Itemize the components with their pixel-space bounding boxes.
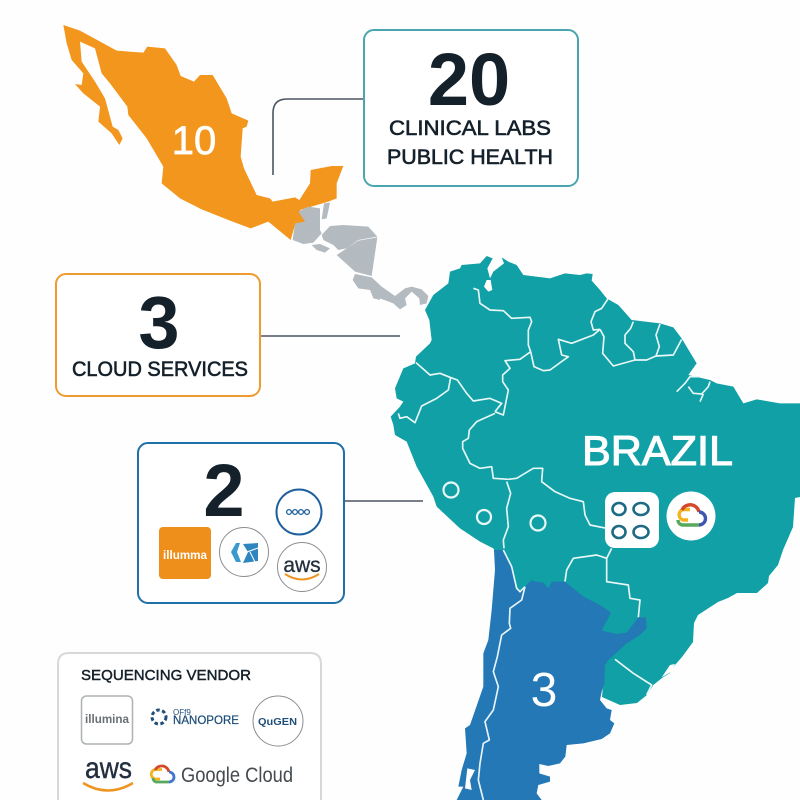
stat: 3: 3 xyxy=(138,281,180,364)
logo: Google Cloud: Google Cloud xyxy=(181,764,293,787)
logo: illumina tile: illumma xyxy=(163,548,207,562)
logo: illumina tile xyxy=(159,527,211,579)
logo: Oxford Nanopore: NANOPORE xyxy=(173,715,239,727)
logo: navy ring circle xyxy=(276,490,322,534)
arrow: clinical labs leader xyxy=(273,99,363,175)
panel: clinical labs xyxy=(364,30,578,186)
logo: Qiagen: QuGEN xyxy=(258,717,297,728)
label: Brazil: BRAZIL xyxy=(582,427,733,474)
logo: Oxford Nanopore xyxy=(152,708,239,727)
logo: Oxford Nanopore: OFf9 xyxy=(173,708,191,717)
logo: blue mosaic circle xyxy=(220,528,268,576)
stat: 2: 2 xyxy=(203,449,245,532)
map: Argentina and Chile xyxy=(457,550,647,800)
logo: illumina xyxy=(82,696,132,744)
panel: sequencing vendor legend xyxy=(58,653,321,800)
arrow: vendors leader xyxy=(344,500,423,502)
logo: aws: aws xyxy=(85,752,132,785)
stat: 20: 20 xyxy=(428,38,510,121)
panel: vendors in Peru and Bolivia xyxy=(138,443,344,603)
label: Argentina count: 3 xyxy=(531,664,557,717)
logo: aws circle xyxy=(278,542,326,592)
markers: Peru and Bolivia sites xyxy=(444,482,546,530)
text: public health: PUBLIC HEALTH xyxy=(387,146,553,169)
arrow: cloud services leader xyxy=(261,335,400,337)
logo: Qiagen xyxy=(253,696,303,746)
label: Mexico count: 10 xyxy=(172,119,216,163)
text: clinical labs: CLINICAL LABS xyxy=(389,117,551,140)
logo: illumina: illumina xyxy=(85,712,129,726)
logo: aws circle: aws xyxy=(283,554,321,577)
map: Mexico xyxy=(63,25,343,240)
icon: Google Cloud badge xyxy=(666,492,716,540)
map: northern South America and Brazil xyxy=(391,256,800,705)
panel: cloud services xyxy=(56,274,260,396)
heading: sequencing vendor: SEQUENCING VENDOR xyxy=(81,667,251,684)
map: Central America xyxy=(293,203,428,309)
text: cloud services: CLOUD SERVICES xyxy=(72,358,248,381)
icon: four-ring vendor tile xyxy=(605,492,659,548)
